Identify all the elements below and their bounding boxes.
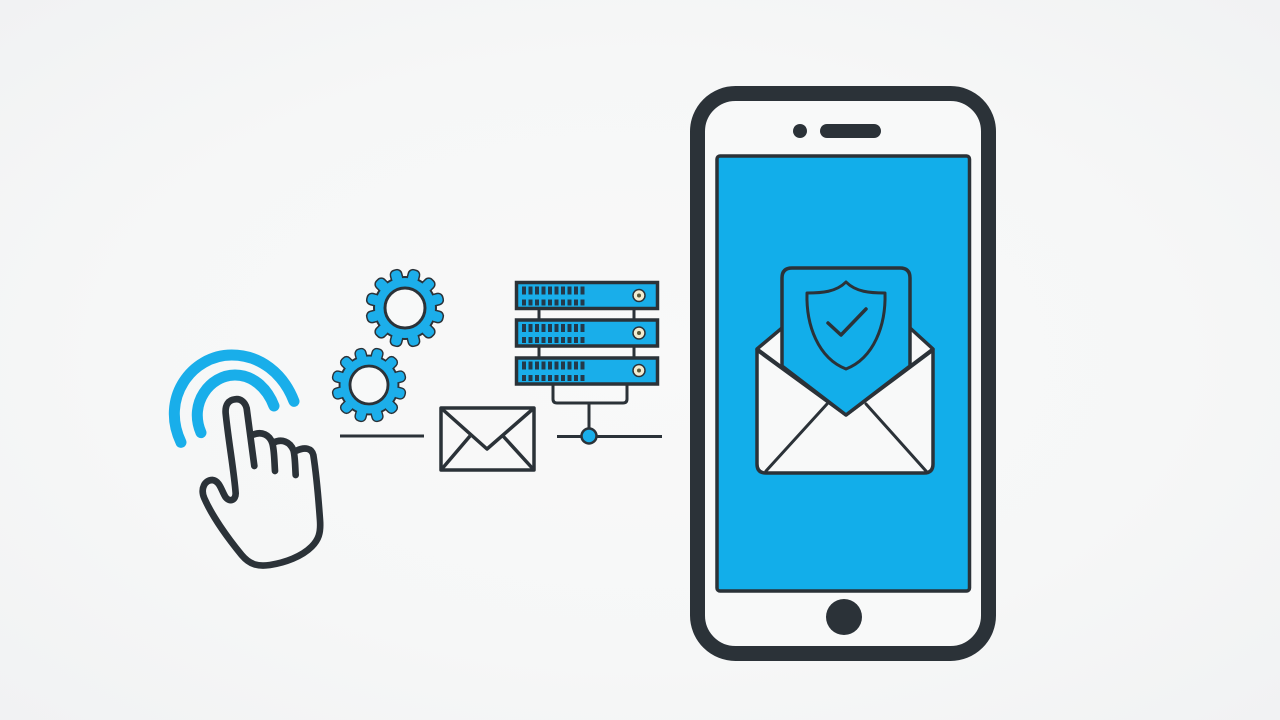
envelope back flap [757,328,933,415]
icon: tapping hand with signal arcs [174,355,320,566]
icon: lower gear [332,348,406,422]
icon: small envelope [441,408,534,470]
server connectors [539,309,634,430]
icon: upper gear [367,270,443,346]
icon: shield with check [807,282,885,369]
envelope fold lines [766,404,926,471]
letter [782,268,910,415]
server unit 3 [516,358,658,384]
icon: hand outline [203,399,320,566]
phone camera [793,124,807,138]
phone speaker [820,124,881,138]
connector line with network node [557,428,662,444]
phone body [698,94,988,654]
icon: server stack [516,282,658,430]
server unit 1 [516,282,658,308]
server unit 2 [516,320,658,346]
envelope front [757,350,933,473]
phone home button [826,599,862,635]
icon: open envelope with shield letter [757,268,933,473]
icon: signal arcs [174,355,294,442]
phone screen [717,156,970,591]
connector line: left [340,434,424,438]
phone [698,94,988,654]
